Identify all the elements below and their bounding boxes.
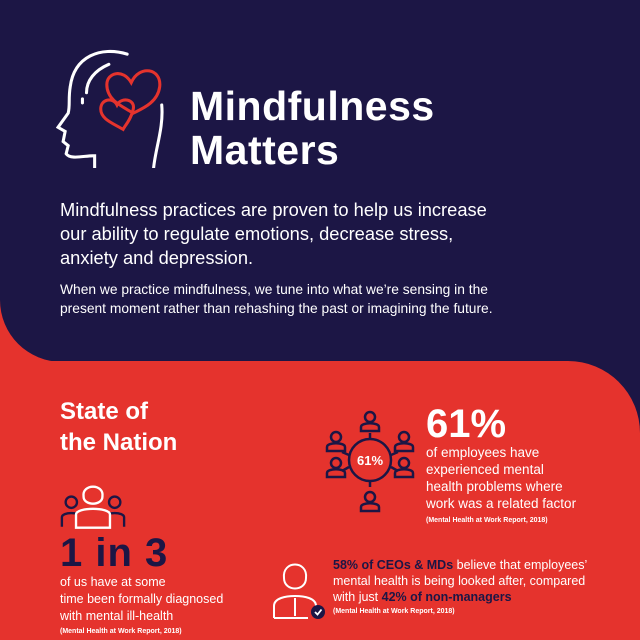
heading: state of the nation	[60, 398, 177, 456]
red lower panel	[0, 300, 640, 640]
stat: 61%	[426, 402, 576, 524]
sub paragraph: When we practice mindfulness, we tune into what we’re sensing in the	[60, 282, 488, 297]
icon: network of people with 61%: 61%	[357, 453, 383, 468]
stat: 61%: of employees have	[426, 445, 539, 460]
intro paragraph	[60, 199, 487, 268]
stat: 61%: work was a related factor	[426, 496, 576, 511]
stat: CEOs vs non-managers: (Mental Health at Work Report, 2018)	[333, 608, 455, 615]
stat: 1 in 3: time been formally diagnosed	[60, 592, 223, 606]
intro paragraph: Mindfulness practices are proven to help us increase	[60, 199, 487, 220]
stat: CEOs vs non-managers	[333, 558, 587, 615]
icon: group of people	[60, 486, 126, 529]
icon: manager with check	[273, 564, 325, 619]
stat: CEOs vs non-managers: mental health is being looked after, compared	[333, 574, 585, 588]
stat: 61%: health problems where	[426, 479, 563, 494]
title	[190, 83, 435, 173]
stat: 61%: experienced mental	[426, 462, 544, 477]
navy upper panel	[0, 0, 640, 362]
stat: 61%: (Mental Health at Work Report, 2018)	[426, 517, 548, 524]
stat: CEOs vs non-managers: 58% of CEOs & MDs believe that employees’	[333, 558, 587, 572]
heading: state of the nation: the Nation	[60, 429, 177, 456]
title: Matters	[190, 127, 339, 173]
stat: 61%: 61%	[426, 402, 506, 446]
heading: state of the nation: State of	[60, 398, 148, 425]
icon: head with hearts	[56, 50, 164, 168]
stat: 1 in 3: 1 in 3	[60, 531, 168, 575]
stat: 1 in 3: of us have at some	[60, 575, 166, 589]
stat: 1 in 3: with mental ill-health	[60, 609, 173, 623]
sub paragraph: present moment rather than rehashing the past or imagining the future.	[60, 301, 493, 316]
intro paragraph: anxiety and depression.	[60, 247, 253, 268]
icon: network of people with 61%	[326, 410, 414, 512]
title: Mindfulness	[190, 83, 435, 129]
intro paragraph: our ability to regulate emotions, decrease stress,	[60, 223, 453, 244]
stat: CEOs vs non-managers: with just 42% of non-managers	[333, 590, 512, 604]
stat: 1 in 3	[60, 531, 223, 635]
stat: 1 in 3: (Mental Health at Work Report, 2018)	[60, 628, 182, 635]
sub paragraph	[60, 282, 493, 316]
